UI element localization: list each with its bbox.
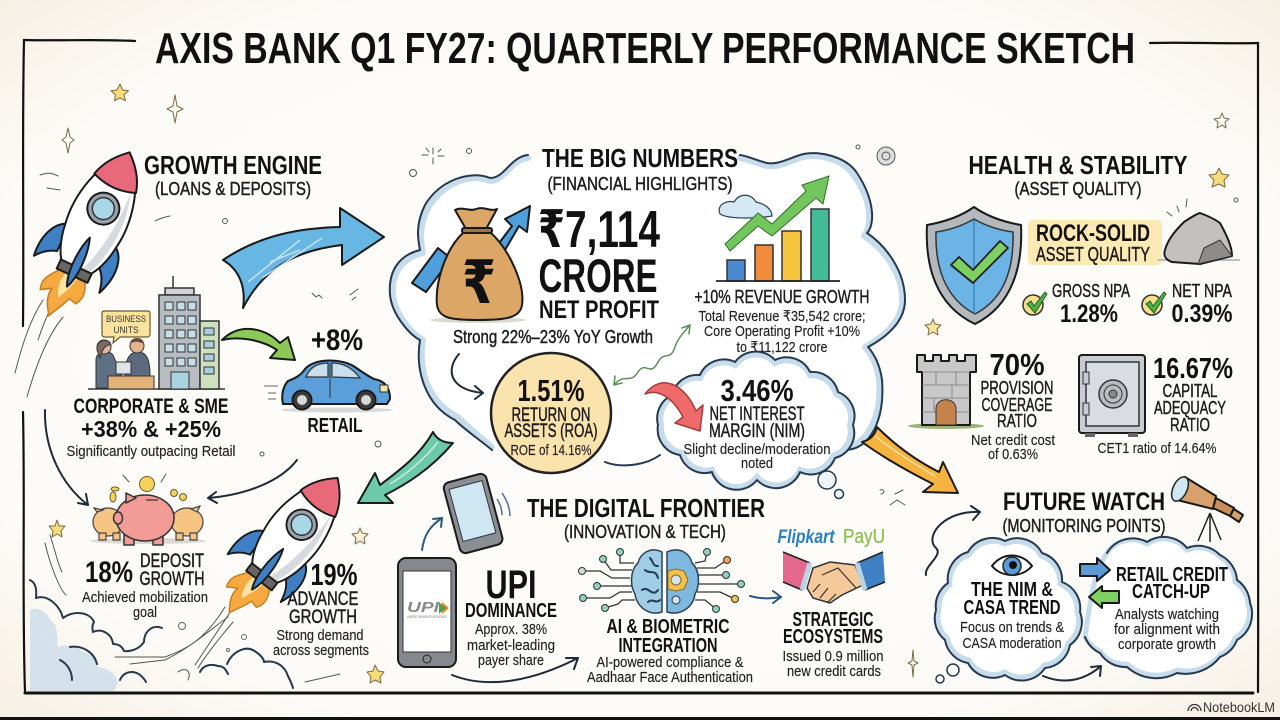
arrow: red decline xyxy=(645,383,703,431)
icon: tilted phone with signal xyxy=(442,473,510,554)
stat: advance growth: ADVANCE xyxy=(288,589,358,610)
callout: rock-solid asset quality: ASSET QUALITY xyxy=(1036,244,1150,266)
stat: deposit growth: GROWTH xyxy=(140,569,204,590)
icon: telescope xyxy=(1168,474,1243,542)
stat: provision coverage ratio: Net credit cost xyxy=(971,432,1056,449)
text: strategic ecosystems xyxy=(782,609,884,680)
arrow: orange to future watch xyxy=(862,427,958,493)
callout: rock-solid asset quality: ROCK-SOLID xyxy=(1036,220,1150,247)
stat: deposit growth xyxy=(82,551,208,621)
stat: retail +8%: +8% xyxy=(311,324,363,357)
icon: money bag with rupee and arrows xyxy=(412,206,530,323)
arrow: up to phone xyxy=(422,518,442,550)
icon: phone with UPI logo: UNIFIED PAYMENTS INTERFACE xyxy=(407,615,447,619)
stat: UPI dominance xyxy=(465,563,557,669)
arrow: blue growth arrow xyxy=(223,208,384,308)
heading: health and stability: (ASSET QUALITY) xyxy=(1014,179,1142,199)
callout: net interest margin cloud: 3.46% xyxy=(720,373,794,408)
text: revenue growth: Total Revenue ₹35,542 crore; xyxy=(698,308,866,325)
stat: UPI dominance: payer share xyxy=(478,652,544,669)
callout: NIM and CASA trend cloud: THE NIM & xyxy=(971,579,1053,601)
arrow: green to advance growth xyxy=(358,432,453,503)
heading: future watch: FUTURE WATCH xyxy=(1003,488,1165,516)
stat: capital adequacy ratio: ADEQUACY xyxy=(1154,398,1226,418)
callout: net interest margin cloud xyxy=(657,352,855,498)
logos: Flipkart and PayU xyxy=(778,526,885,548)
stat: net profit: CRORE xyxy=(538,249,658,302)
icon: eye xyxy=(992,556,1032,575)
callout: net interest margin cloud: MARGIN (NIM) xyxy=(709,421,805,442)
text: AI and biometric integration: AI-powered compliance & xyxy=(596,654,744,671)
callout: business units: BUSINESS xyxy=(106,314,146,325)
arrow: UPI to AI xyxy=(452,658,578,682)
icon: money bag with rupee and arrows: ₹ xyxy=(462,249,496,316)
text: AI and biometric integration xyxy=(587,616,753,686)
stat: UPI dominance: Approx. 38% xyxy=(475,621,547,638)
logos: Flipkart and PayU: PayU xyxy=(843,526,885,548)
heading: growth engine xyxy=(144,150,322,199)
text: strategic ecosystems: new credit cards xyxy=(787,663,881,680)
heading: future watch: (MONITORING POINTS) xyxy=(1002,516,1166,536)
logos: Flipkart and PayU: Flipkart xyxy=(778,527,835,548)
decorative scribbles xyxy=(155,198,1238,505)
heading: health and stability xyxy=(968,150,1188,199)
decorative stars xyxy=(49,84,1229,683)
stat: UPI dominance: market-leading xyxy=(467,637,555,654)
callout: retail credit catch-up cloud: RETAIL CREDIT xyxy=(1116,564,1228,586)
panel: the digital frontier xyxy=(398,473,885,686)
text: strategic ecosystems: STRATEGIC xyxy=(792,609,874,631)
stat: net profit: NET PROFIT xyxy=(539,296,659,324)
illustration: launch smoke clouds xyxy=(30,535,340,691)
callout: net interest margin cloud: Slight decline/moderation xyxy=(684,441,830,458)
callout: return on assets: RETURN ON xyxy=(512,405,590,426)
callout: retail credit catch-up cloud xyxy=(1085,537,1252,678)
panel: future watch xyxy=(926,474,1252,683)
icon: shield with check xyxy=(927,207,1021,324)
callout: NIM and CASA trend cloud: CASA moderation xyxy=(962,635,1062,652)
heading: the digital frontier xyxy=(527,493,765,542)
icon: phone with UPI logo xyxy=(398,558,456,667)
stat: UPI dominance: DOMINANCE xyxy=(465,600,557,622)
stat: gross NPA: 1.28% xyxy=(1060,300,1118,328)
panel: health and stability xyxy=(908,150,1240,463)
watermark: NotebookLM: NotebookLM xyxy=(1203,700,1275,715)
stat: advance growth: across segments xyxy=(273,642,369,659)
heading: the big numbers: THE BIG NUMBERS xyxy=(542,143,738,173)
callout: retail credit catch-up cloud: CATCH-UP xyxy=(1132,581,1210,603)
stat: capital adequacy ratio: RATIO xyxy=(1170,415,1210,435)
icon: safe xyxy=(1079,355,1145,437)
icon: AI brain with circuits xyxy=(578,548,744,613)
text: corporate and SME: +38% & +25% xyxy=(81,416,221,442)
text: revenue growth: +10% REVENUE GROWTH xyxy=(694,287,870,307)
text: strategic ecosystems: ECOSYSTEMS xyxy=(783,626,883,648)
stat: net NPA: 0.39% xyxy=(1172,300,1232,328)
arrow: blue right xyxy=(1080,558,1110,581)
stat: capital adequacy ratio: 16.67% xyxy=(1153,353,1233,385)
text: corporate and SME: Significantly outpacing Retail xyxy=(66,443,236,460)
callout: return on assets: 1.51% xyxy=(518,373,584,408)
heading: growth engine: (LOANS & DEPOSITS) xyxy=(155,179,311,199)
callout: business units: UNITS xyxy=(114,325,138,336)
stat: net profit: Strong 22%–23% YoY Growth xyxy=(453,327,653,347)
callout: return on assets: ASSETS (ROA) xyxy=(504,421,598,442)
stat: capital adequacy ratio: CAPITAL xyxy=(1162,381,1218,401)
stat: gross NPA: GROSS NPA xyxy=(1052,281,1130,301)
callout: NIM and CASA trend cloud xyxy=(935,538,1082,683)
arrow: squiggle to revenue xyxy=(614,325,690,385)
panel: the big numbers xyxy=(390,143,905,498)
panel: deposits xyxy=(82,474,208,621)
stat: advance growth: 19% xyxy=(310,557,358,592)
text: revenue growth: to ₹11,122 crore xyxy=(736,339,828,356)
stat: net profit: ₹7,114 xyxy=(538,201,660,259)
icon: piggy banks with coins xyxy=(90,474,206,545)
callout: rock-solid asset quality xyxy=(1028,220,1162,266)
text: AI and biometric integration: INTEGRATION xyxy=(618,635,718,657)
stat: advance growth xyxy=(273,557,369,659)
heading: growth engine: GROWTH ENGINE xyxy=(144,150,322,180)
icon: rocket launching xyxy=(13,134,164,397)
icon: corporate office with business units xyxy=(88,276,225,389)
callout: retail credit catch-up cloud: corporate growth xyxy=(1118,636,1216,653)
cloud outline xyxy=(390,153,905,465)
stat: gross NPA xyxy=(1023,281,1130,328)
stat: net NPA: NET NPA xyxy=(1172,281,1232,301)
callout: net interest margin cloud: NET INTEREST xyxy=(710,404,805,425)
stat: provision coverage ratio xyxy=(971,347,1056,463)
stat: provision coverage ratio: RATIO xyxy=(997,411,1037,431)
stat: net profit xyxy=(453,201,660,347)
callout: business units xyxy=(102,311,150,343)
stat: deposit growth: 18% xyxy=(85,556,133,589)
heading: health and stability: HEALTH & STABILITY xyxy=(968,150,1188,180)
stat: deposit growth: goal xyxy=(133,604,157,621)
heading: the digital frontier: (INNOVATION & TECH) xyxy=(564,522,726,542)
arrow: green left xyxy=(1089,586,1119,608)
callout: return on assets xyxy=(491,353,611,473)
stat: provision coverage ratio: PROVISION xyxy=(980,378,1054,398)
text: revenue growth: Core Operating Profit +10% xyxy=(704,323,860,340)
icon: handshake xyxy=(783,552,885,603)
callout: net interest margin cloud: noted xyxy=(741,455,773,472)
stat: advance growth: GROWTH xyxy=(289,607,357,628)
callout: NIM and CASA trend cloud: Focus on trends & xyxy=(960,619,1064,636)
arrow: bottom curve xyxy=(1043,666,1101,681)
arrow: green to retail xyxy=(222,329,295,360)
stat: capital adequacy ratio: CET1 ratio of 14.64% xyxy=(1098,440,1216,457)
arrow: squiggle to heading xyxy=(926,506,980,575)
label: retail: RETAIL xyxy=(308,415,362,437)
text: revenue growth xyxy=(694,287,870,356)
icon: second rocket xyxy=(199,453,366,637)
text: strategic ecosystems: Issued 0.9 million xyxy=(782,648,884,665)
stat: provision coverage ratio: COVERAGE xyxy=(982,395,1052,415)
heading: future watch xyxy=(1002,488,1166,536)
icon: phone with UPI logo: UPI xyxy=(407,599,440,616)
icon: rock xyxy=(1158,199,1240,264)
decorative marks xyxy=(410,145,895,176)
stat: capital adequacy ratio xyxy=(1098,353,1233,457)
stat: UPI dominance: UPI xyxy=(486,563,536,607)
text: corporate and SME: CORPORATE & SME xyxy=(74,395,228,418)
arrow: AI to ecosystems xyxy=(750,591,781,603)
text: corporate and SME xyxy=(66,395,236,460)
heading: the big numbers xyxy=(542,143,738,194)
callout: retail credit catch-up cloud: Analysts watching xyxy=(1115,606,1219,623)
arrow: from profit to ROA xyxy=(452,354,483,399)
callout: retail credit catch-up cloud: for alignment with xyxy=(1114,621,1220,638)
icon: blue car xyxy=(264,360,393,412)
text: AI and biometric integration: AI & BIOMETRIC xyxy=(606,616,730,638)
callout: NIM and CASA trend cloud: CASA TREND xyxy=(964,597,1060,619)
stat: advance growth: Strong demand xyxy=(276,627,364,644)
stat: deposit growth: Achieved mobilization xyxy=(82,589,208,606)
heading: the digital frontier: THE DIGITAL FRONTIER xyxy=(527,493,765,523)
callout: return on assets: ROE of 14.16% xyxy=(510,442,592,459)
stat: provision coverage ratio: of 0.63% xyxy=(988,446,1038,463)
stat: deposit growth: DEPOSIT xyxy=(140,551,204,572)
stat: provision coverage ratio: 70% xyxy=(990,347,1044,382)
heading: the big numbers: (FINANCIAL HIGHLIGHTS) xyxy=(548,174,732,194)
panel: growth engine xyxy=(13,134,393,460)
arrow: corporate to deposits xyxy=(45,410,88,505)
arrow: retail to deposits xyxy=(208,460,297,503)
chart: rising revenue bars xyxy=(716,176,840,281)
stat: net NPA xyxy=(1142,281,1232,328)
text: AI and biometric integration: Aadhaar Face Authentication xyxy=(587,669,753,686)
panel: advance growth xyxy=(199,453,369,659)
icon: castle tower xyxy=(908,355,984,429)
